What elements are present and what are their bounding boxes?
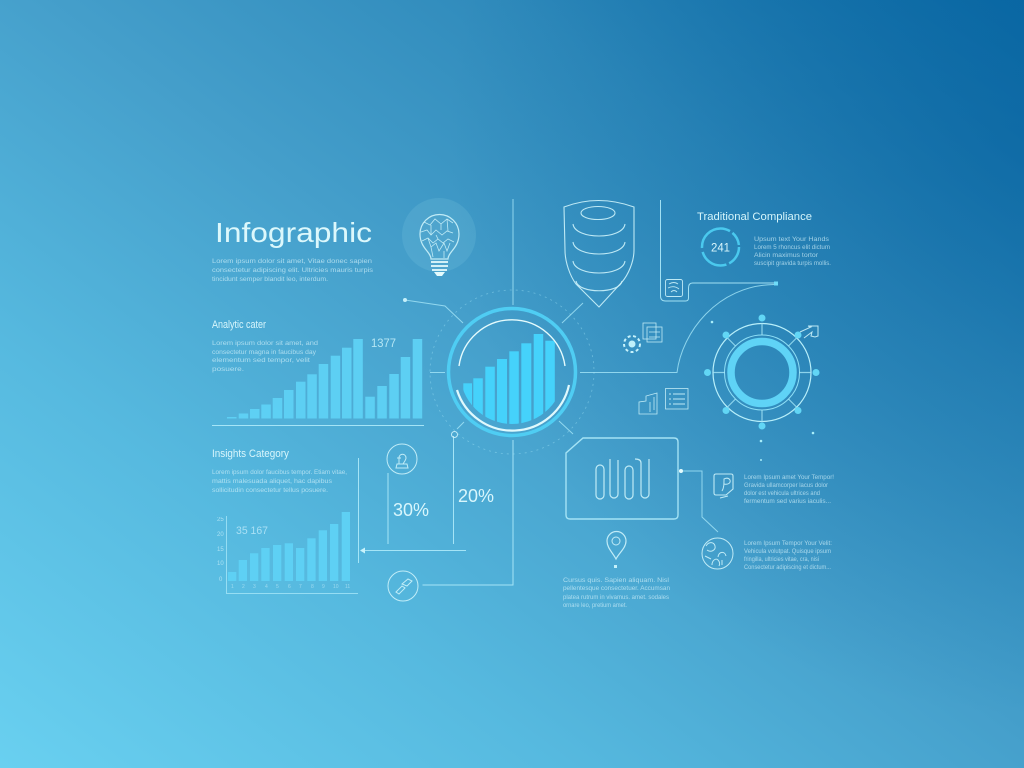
- gauge: 241: 241: [711, 242, 730, 254]
- x axis labels: 3: [253, 584, 256, 590]
- text block: insights: mattis malesuada aliquet, hac dapibus: [212, 478, 333, 485]
- text block: right top: Lorem 5 rhoncus elit dictum: [754, 244, 830, 251]
- title: Infographic: [215, 217, 372, 248]
- text block: right top: Alicin maximus tortor: [754, 252, 819, 259]
- text block: badge: dolor est vehicula ultrices and: [744, 490, 820, 497]
- y axis labels: 10: [217, 561, 224, 567]
- x axis labels: 4: [265, 584, 268, 590]
- text block: right top: Upsum text Your Hands: [754, 236, 830, 243]
- connector: right panel frame: [660, 200, 778, 301]
- chart baseline: [212, 424, 424, 426]
- x axis labels: 9: [322, 584, 325, 590]
- text block: analytics: Lorem ipsum dolor sit amet, and: [212, 340, 318, 347]
- text block: insights: [212, 469, 347, 494]
- icon: lock circle: [387, 444, 417, 474]
- connector: shield to hub: [562, 303, 583, 323]
- connector: curve to right panel: [594, 284, 774, 372]
- stat: 30%: 30%: [393, 500, 429, 520]
- icon: light bulb: [402, 198, 476, 276]
- x axis labels: 6: [288, 584, 291, 590]
- x axis labels: 8: [311, 584, 314, 590]
- connector: bulb to hub: [405, 300, 463, 323]
- text block: right top: suscipit gravida turpis mollis.: [754, 260, 831, 267]
- x axis labels: 1: [231, 584, 234, 590]
- text block: pin: pellentesque consectetuer. Accumsan: [563, 585, 670, 592]
- text block: pin: ornare leo, pretium amet.: [563, 602, 627, 609]
- text block: people: [744, 540, 832, 571]
- connector: lock down: [387, 473, 389, 544]
- text block: pin: platea rutrum in vivamus. amet. sodales: [563, 594, 670, 601]
- y axis labels: 15: [217, 547, 224, 553]
- text block: intro: [212, 258, 374, 283]
- heading: analytics: Analytic cater: [212, 319, 266, 331]
- icon: shield database: [564, 200, 634, 307]
- text block: badge: Lorem Ipsum amet Your Tempor!: [744, 474, 834, 481]
- connector node: [774, 282, 778, 286]
- x axis labels: 2: [242, 584, 245, 590]
- text block: analytics: elementum sed tempor, velit: [212, 357, 310, 364]
- icon: list lines: [669, 394, 685, 404]
- connector: hub to link: [422, 440, 513, 585]
- icon: pin: [607, 532, 626, 568]
- x axis labels: 5: [276, 584, 279, 590]
- x axis labels: 7: [299, 584, 302, 590]
- text block: pin: Cursus quis. Sapien aliquam. Nisl: [563, 577, 670, 584]
- text block: insights: sollicitudin consectetur tellus posuere.: [212, 487, 328, 494]
- connector: chip to people: [679, 471, 718, 532]
- connector node: [679, 469, 683, 473]
- text block: people: fringilla, ultricies vitae, cra, nisi: [744, 556, 819, 563]
- y axis labels: [217, 517, 224, 583]
- y axis labels: 0: [219, 577, 223, 583]
- x axis labels: 11: [345, 584, 350, 590]
- icon: link circle: [388, 571, 418, 601]
- icon: building chart: [639, 393, 657, 414]
- text block: intro: consectetur adipiscing elit. Ultricies mauris turpis: [212, 267, 374, 274]
- icon: arrow out: [800, 326, 818, 338]
- text block: intro: tincidunt semper blandit leo, interdum.: [212, 276, 328, 283]
- text block: badge: Gravida ullamcorper lacus dolor: [744, 482, 829, 489]
- connector node: [403, 298, 407, 302]
- icon: documents: [643, 323, 662, 342]
- text block: intro: Lorem ipsum dolor sit amet, Vitae donec sapien: [212, 258, 372, 265]
- dial: right ring: [704, 314, 820, 430]
- panel: chip: [566, 438, 678, 519]
- panel frame line: [358, 458, 360, 563]
- text block: right top: [754, 236, 831, 267]
- gauge: 241: [702, 228, 739, 266]
- hub connector ticks: [430, 372, 594, 434]
- text block: badge: fermentum sed varius iaculis...: [744, 498, 831, 505]
- icon: gear: [624, 336, 640, 352]
- y axis labels: 20: [217, 532, 224, 538]
- icon: badge: [714, 474, 733, 498]
- text block: people: Vehicula volutpat. Quisque ipsum: [744, 548, 831, 555]
- connector: hub to arrow: [452, 436, 454, 544]
- text block: badge: [744, 474, 834, 505]
- icon: list card: [666, 388, 688, 409]
- icon: people: [702, 538, 733, 569]
- text block: analytics: consectetur magna in faucibus day: [212, 349, 317, 356]
- heading: insights: Insights Category: [212, 448, 289, 460]
- text block: people: Consectetur adipiscing et dictum...: [744, 564, 831, 571]
- text block: analytics: [212, 340, 318, 373]
- y axis labels: 25: [217, 517, 224, 523]
- connector: top line: [512, 199, 514, 305]
- chart value: 1377: [371, 338, 396, 350]
- heading: right panel: Traditional Compliance: [697, 211, 812, 223]
- x axis labels: [231, 584, 350, 590]
- hub: central chart: [430, 290, 594, 454]
- connector node: [452, 432, 458, 438]
- x axis labels: 10: [333, 584, 339, 590]
- icon: small fingerprint: [666, 280, 682, 296]
- small dots: [711, 321, 814, 461]
- text block: people: Lorem Ipsum Tempor Your Velit:: [744, 540, 832, 547]
- chart value: 35 167: [236, 525, 268, 537]
- bar chart: analytics: [227, 339, 422, 418]
- bar chart: insights: [228, 512, 350, 581]
- stat: 20%: 20%: [458, 486, 494, 506]
- text block: insights: Lorem ipsum dolor faucibus tempor. Etiam vitae,: [212, 469, 347, 476]
- text block: analytics: posuere.: [212, 366, 244, 373]
- text block: pin: [563, 577, 670, 609]
- chart axes: [226, 516, 358, 594]
- arrow: pointing to chart: [360, 548, 466, 554]
